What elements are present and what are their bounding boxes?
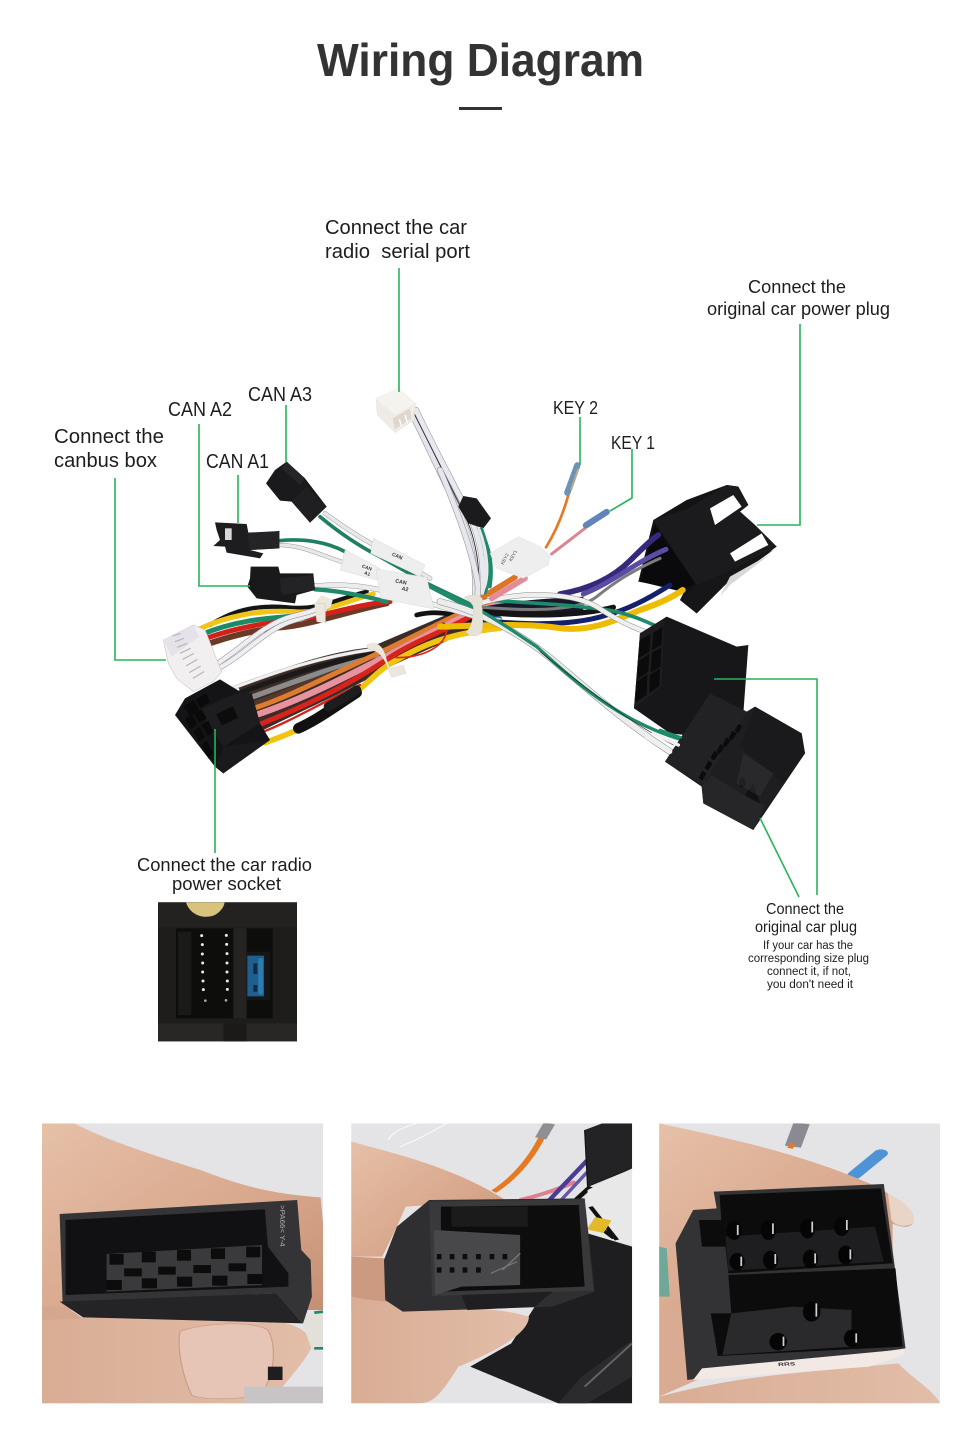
photo 2: power plug in hand (351, 1123, 632, 1403)
wire label tag: keys: KEY1 (508, 549, 518, 562)
label: original car plug with note: connect it, if not, (767, 966, 851, 978)
harness photo: right half (440, 465, 805, 830)
fuse (247, 956, 264, 996)
label: KEY 1: KEY 1 (611, 433, 655, 453)
label: CAN A3: CAN A3 (248, 384, 312, 406)
wires: CAN A2 pair (315, 585, 500, 623)
label: original car plug with note: Connect the (766, 901, 844, 918)
label tag: CAN A2: CAN (395, 578, 407, 587)
label: original car plug with note: If your car has the (763, 940, 853, 952)
label tag: CAN A2 (376, 569, 434, 609)
label: car radio power socket (137, 855, 312, 894)
wires: key 2 and key 1 (483, 495, 585, 598)
label: canbus box: canbus box (54, 450, 157, 472)
label: original car plug with note: you don't need it (767, 979, 854, 991)
label: canbus box (54, 426, 164, 472)
heat shrink: key 2 (567, 465, 578, 493)
wires: CAN A1 pair (279, 540, 347, 563)
cable tie: centre (464, 595, 483, 636)
wires: canbus box bundle (198, 592, 390, 667)
harness photo: left half (163, 388, 500, 773)
label: serial port: radio serial port (325, 241, 470, 263)
connector: original car plug rear body (634, 617, 748, 737)
label tag: CAN A2: A2 (401, 586, 409, 593)
wires: CAN A3 pair (320, 513, 500, 618)
label: serial port: Connect the car (325, 217, 467, 239)
cable tie: middle (367, 643, 406, 677)
label tag: CAN A3 (371, 538, 425, 577)
wires: plug cable lower (440, 592, 680, 752)
label: KEY 2: KEY 2 (553, 398, 598, 418)
photo 1: radio plug in hand (42, 1123, 324, 1403)
label: CAN A2: CAN A2 (168, 399, 232, 421)
label: serial port (325, 217, 470, 263)
heat shrink: key 1 (586, 512, 607, 525)
wires: main power bundle (235, 600, 500, 743)
connector: original car plug front body (665, 693, 805, 830)
photo: radio power socket (158, 902, 297, 1041)
label: power plug: original car power plug (707, 299, 890, 319)
connector: CAN A1 (213, 522, 279, 558)
label: original car plug with note: original car plug (755, 919, 857, 936)
label tag: CAN A1 (340, 550, 380, 580)
leader lines (115, 268, 817, 897)
label tag: CAN A3: CAN (391, 552, 404, 562)
label: original car plug with note (748, 901, 869, 991)
label tag: CAN A1: CAN (361, 564, 373, 572)
label: car radio power socket: power socket (172, 874, 281, 894)
connector: serial port plug (376, 388, 416, 433)
connector: car radio power socket plug (175, 679, 270, 773)
pin dots (200, 934, 229, 1002)
connector: canbus box plug (163, 625, 222, 692)
photo 1: radio plug in hand: >PA66< Y-4 (278, 1205, 286, 1247)
connector: CAN A3 (266, 462, 327, 523)
title: Wiring Diagram (317, 34, 644, 86)
photo 3: original plug in hand: RRS (778, 1362, 796, 1367)
wires: power plug bundle (440, 535, 683, 634)
cable tie: left (314, 595, 333, 623)
label: power plug: Connect the (748, 277, 846, 297)
small black connector behind cable (458, 496, 491, 528)
label: canbus box: Connect the (54, 426, 164, 448)
label: CAN A1: CAN A1 (206, 451, 269, 473)
label tag: CAN A1: A1 (364, 570, 371, 577)
wires: plug cable ends on top (647, 730, 681, 752)
label: original car plug with note: corresponding size plug (748, 953, 869, 965)
wire: serial port cable (410, 410, 491, 600)
label: power plug (707, 277, 890, 319)
photo 3: original plug in hand (659, 1123, 940, 1403)
connector: CAN A2 (247, 567, 315, 603)
wire label tag: keys (490, 537, 550, 578)
label: car radio power socket: Connect the car radio (137, 855, 312, 875)
wire: serial cable overlay (440, 470, 490, 597)
sticker (186, 902, 225, 917)
heat shrink on main bundle (328, 690, 357, 707)
wire label tag: keys: KEY2 (500, 552, 510, 565)
connector: original car power plug (638, 485, 777, 613)
title (317, 34, 644, 110)
